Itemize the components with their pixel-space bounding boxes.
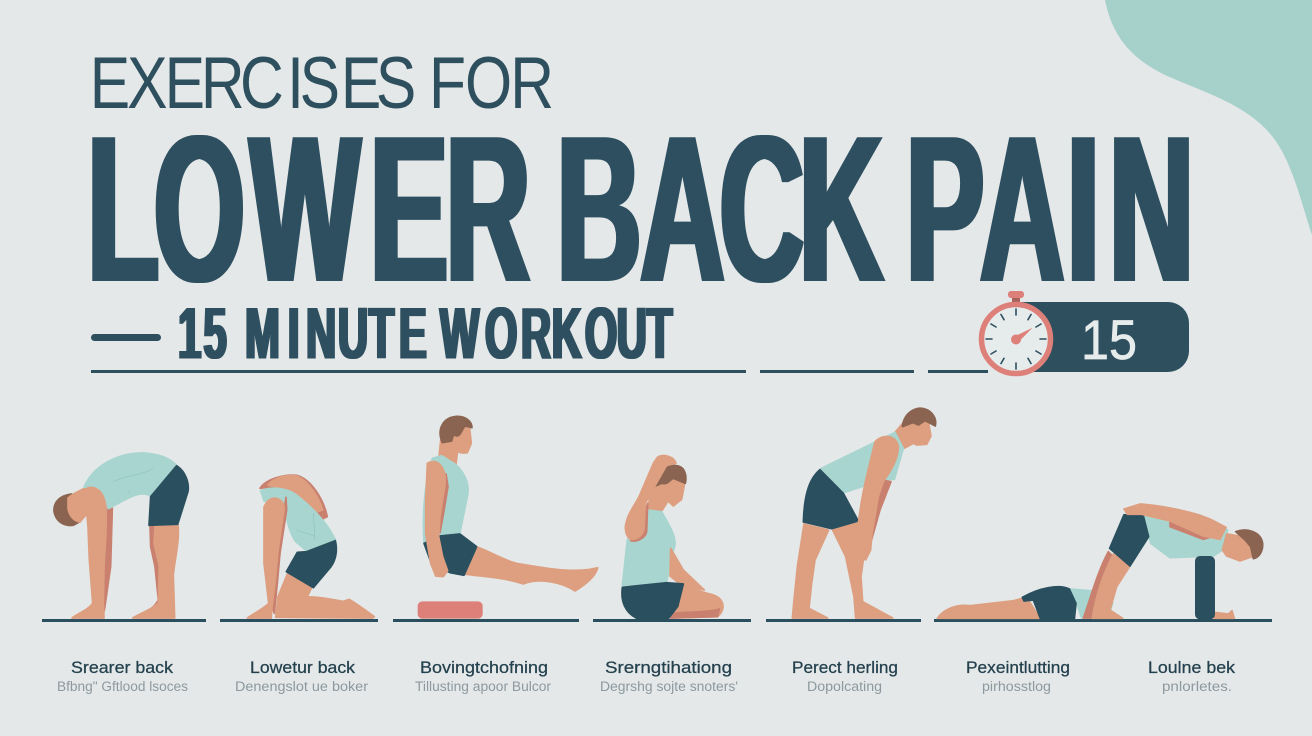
label 5: Perect herling bbox=[792, 659, 898, 677]
label 3: Bovingtchofning bbox=[420, 659, 548, 677]
timer badge bbox=[982, 291, 1189, 374]
label 6: Pexeintlutting bbox=[966, 659, 1070, 677]
label 7 bbox=[1148, 659, 1236, 694]
label 1: Bfbng" Gftlood lsoces bbox=[57, 679, 188, 694]
label 4: Srerngtihationg bbox=[605, 659, 732, 677]
label 2: Denengslot ue boker bbox=[235, 679, 369, 694]
label 6: pirhosstlog bbox=[982, 679, 1051, 694]
label 7: Loulne bek bbox=[1148, 659, 1236, 677]
decorative corner blob bbox=[1105, 0, 1312, 235]
figure 3: seated leg raise on cushion bbox=[418, 416, 598, 619]
label 1: Srearer back bbox=[71, 659, 174, 677]
figure 5: standing bent over, hands on knees bbox=[792, 408, 936, 618]
figure 4: seated overhead arm stretch bbox=[622, 456, 723, 619]
label 5: Dopolcating bbox=[807, 679, 882, 694]
cushion bbox=[418, 601, 483, 619]
label 7: pnlorletes. bbox=[1162, 679, 1232, 694]
label 2 bbox=[235, 659, 369, 694]
figure 2: kneeling back stretch bbox=[247, 475, 374, 618]
title line: lower back pain: LOWER BACK PAIN bbox=[87, 92, 1194, 325]
label 4 bbox=[600, 659, 738, 694]
figure 1: standing forward bend bbox=[54, 453, 188, 618]
figure 6: lying and kneeling stretch with block bbox=[937, 504, 1263, 619]
label 2: Lowetur back bbox=[250, 659, 356, 677]
label 1 bbox=[57, 659, 188, 694]
exercise labels bbox=[57, 659, 1236, 694]
floor lines bbox=[42, 619, 1272, 622]
label 4: Degrshg sojte snoters' bbox=[600, 679, 738, 694]
label 5 bbox=[792, 659, 898, 694]
subtitle dash bbox=[91, 334, 161, 341]
title line: exercises for: EXERCISES FOR bbox=[90, 43, 554, 124]
label 3 bbox=[415, 659, 552, 694]
label 6 bbox=[966, 659, 1070, 694]
badge number: 15 bbox=[1081, 308, 1137, 371]
badge pill bbox=[1020, 302, 1189, 372]
subtitle: 15 minute workout: 15 MINUTE WORKOUT bbox=[178, 292, 672, 374]
subtitle rule bbox=[91, 370, 988, 373]
icon: stopwatch bbox=[982, 291, 1050, 374]
label 3: Tillusting apoor Bulcor bbox=[415, 679, 552, 694]
